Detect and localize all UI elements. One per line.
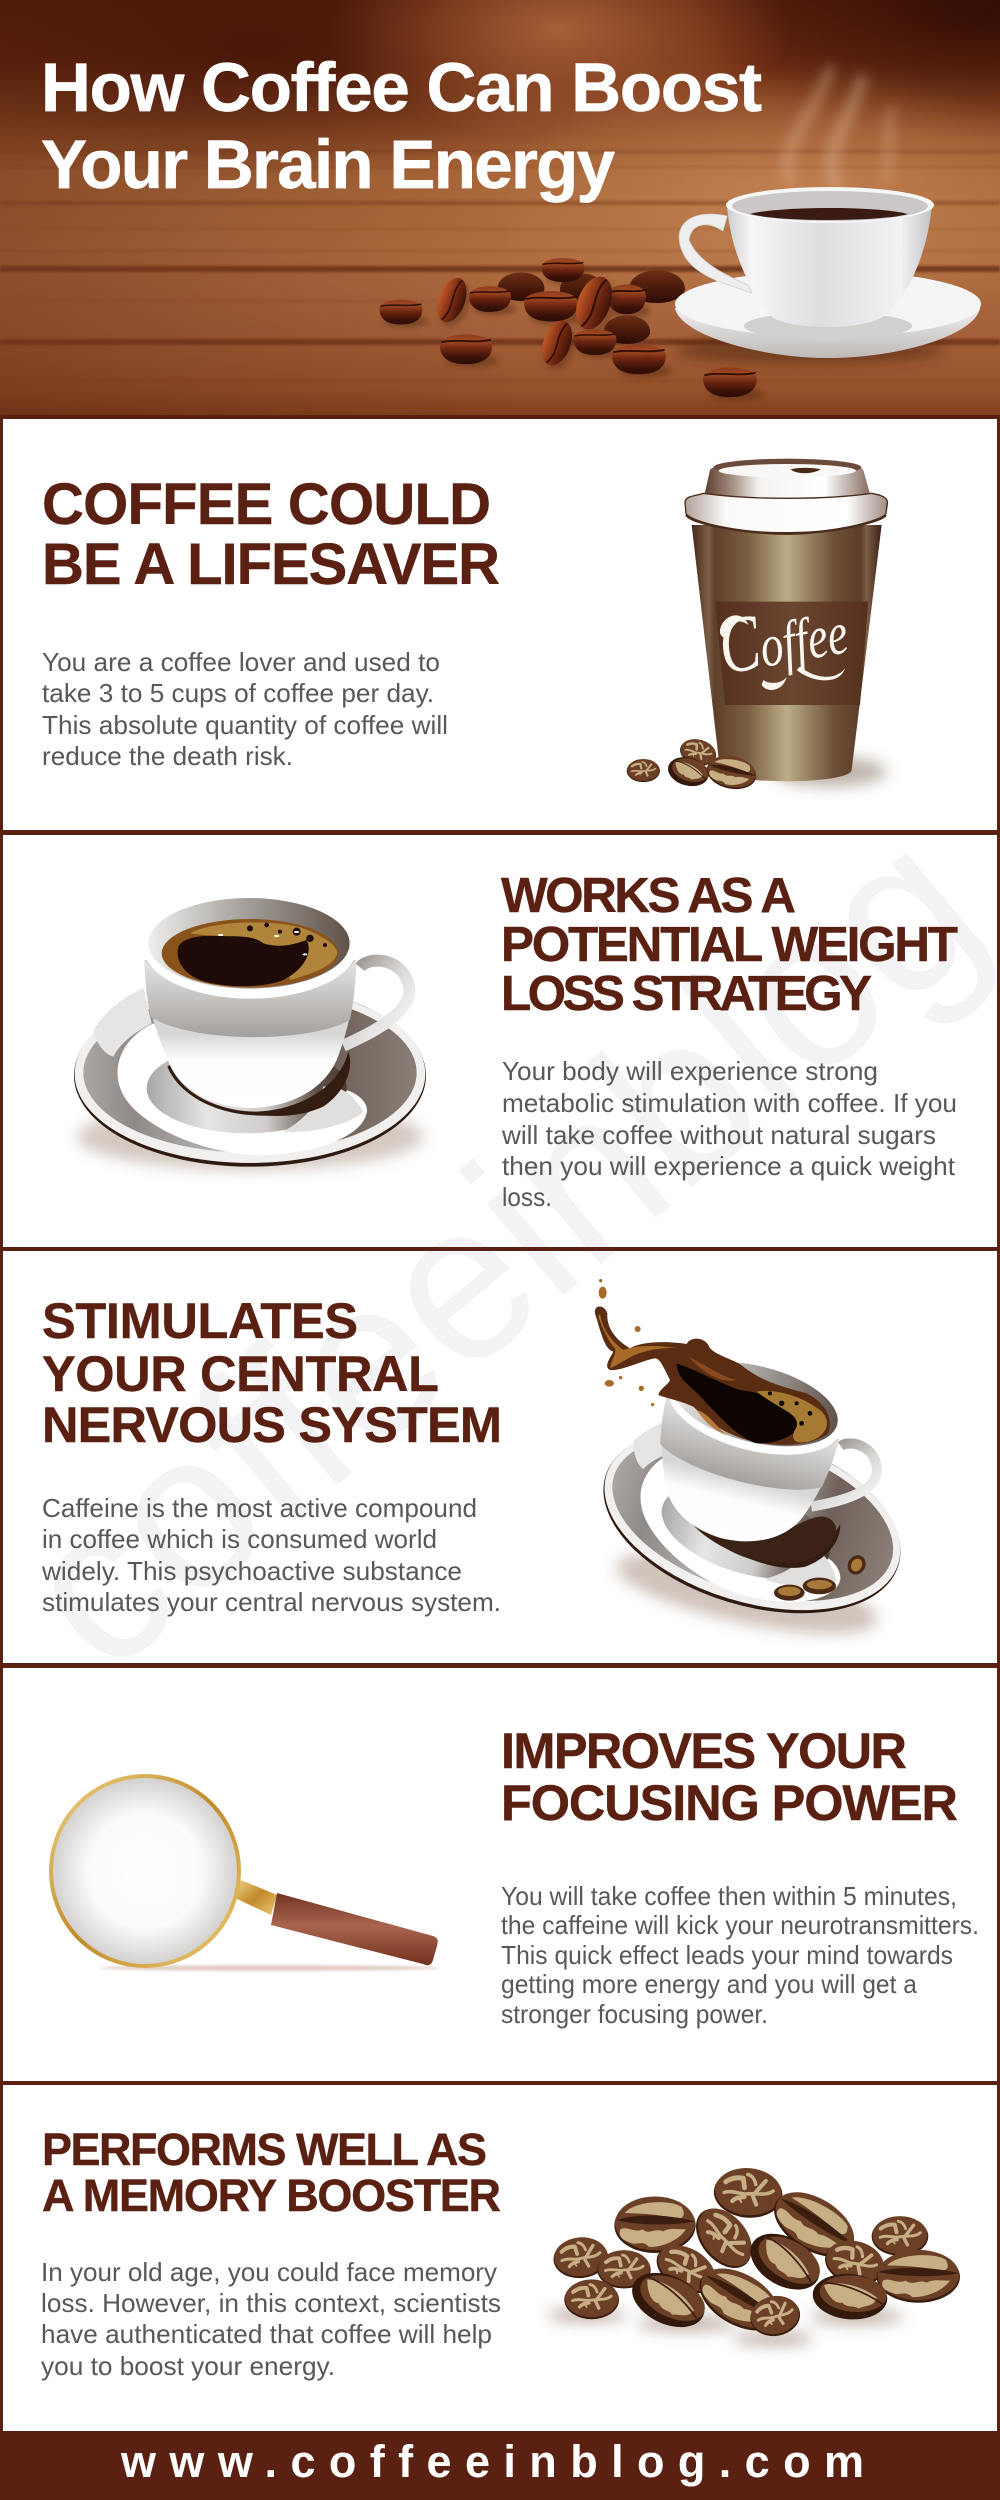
heading: WORKS AS A <box>501 868 796 923</box>
text block: you to boost your energy. <box>41 2351 335 2381</box>
text block <box>501 1056 957 1212</box>
coffee splash <box>595 1279 830 1445</box>
icon: white cup on saucer <box>675 187 981 364</box>
text block: stronger focusing power. <box>501 1999 768 2029</box>
text block: loss. <box>502 1182 552 1212</box>
title: How Coffee Can Boost <box>41 49 762 126</box>
text block: getting more energy and you will get a <box>501 1969 918 1999</box>
text block: You are a coffee lover and used to <box>42 647 440 677</box>
title <box>41 49 762 203</box>
coffee surface <box>162 919 338 988</box>
heading: COFFEE COULD <box>42 472 491 537</box>
heading: LOSS STRATEGY <box>501 966 872 1021</box>
title: Your Brain Energy <box>41 126 615 203</box>
website address: www.coffeeinblog.com <box>120 2436 864 2487</box>
text block: In your old age, you could face memory <box>41 2257 497 2287</box>
panel: improves your focusing power <box>51 1722 979 2029</box>
label: Coffee script: Coffee <box>712 583 853 692</box>
panel: stimulates your central nervous system <box>41 1279 923 1650</box>
heading: NERVOUS SYSTEM <box>42 1396 502 1453</box>
header banner <box>0 0 1000 418</box>
text block: You will take coffee then within 5 minutes, <box>501 1881 957 1911</box>
text block: the caffeine will kick your neurotransmitters. <box>501 1910 979 1940</box>
heading: BE A LIFESAVER <box>42 532 500 597</box>
text block: will take coffee without natural sugars <box>501 1120 936 1150</box>
heading <box>501 1722 958 1831</box>
panel: performs well as a memory booster <box>41 2124 960 2381</box>
icon: espresso cup on saucer <box>74 898 426 1170</box>
heading <box>42 1292 502 1453</box>
text block <box>501 1881 979 2029</box>
text block: take 3 to 5 cups of coffee per day. <box>42 678 434 708</box>
heading: PERFORMS WELL AS <box>42 2124 487 2175</box>
text block: widely. This psychoactive substance <box>41 1556 462 1586</box>
text block: stimulates your central nervous system. <box>42 1587 501 1617</box>
icon: takeaway coffee cup <box>627 459 887 793</box>
icon: pile of coffee beans <box>547 2165 960 2346</box>
heading <box>42 472 500 597</box>
text block: This quick effect leads your mind towards <box>501 1940 953 1970</box>
heading <box>42 2124 501 2221</box>
panel: works as a potential weight loss strategy <box>74 868 958 1212</box>
text block <box>41 2257 501 2381</box>
beans on saucer <box>774 1552 869 1601</box>
heading: A MEMORY BOOSTER <box>42 2170 501 2221</box>
heading <box>501 868 958 1021</box>
text block: metabolic stimulation with coffee. If you <box>502 1088 957 1118</box>
text block: have authenticated that coffee will help <box>41 2319 492 2349</box>
cup shadow on saucer <box>685 1515 836 1563</box>
icon: coffee beans on table <box>380 258 763 401</box>
heading: FOCUSING POWER <box>501 1774 958 1831</box>
wood background <box>0 0 1000 418</box>
text block <box>41 1493 501 1617</box>
heading: POTENTIAL WEIGHT <box>501 917 958 972</box>
text block: This absolute quantity of coffee will <box>42 710 448 740</box>
heading: IMPROVES YOUR <box>501 1722 907 1779</box>
text block: reduce the death risk. <box>42 741 293 771</box>
footer bar <box>0 2431 1000 2500</box>
text block: Caffeine is the most active compound <box>42 1493 477 1523</box>
text block: then you will experience a quick weight <box>502 1151 956 1181</box>
icon: steam <box>787 70 892 185</box>
text block: Your body will experience strong <box>502 1056 878 1086</box>
icon: magnifying glass <box>51 1776 440 1971</box>
text block: loss. However, in this context, scientists <box>41 2288 501 2318</box>
panel: coffee could be a lifesaver <box>42 459 887 793</box>
icon: splashing coffee cup <box>581 1279 923 1650</box>
text block: in coffee which is consumed world <box>42 1524 437 1554</box>
heading: STIMULATES <box>42 1292 358 1349</box>
heading: YOUR CENTRAL <box>42 1345 439 1402</box>
text block <box>42 647 448 771</box>
